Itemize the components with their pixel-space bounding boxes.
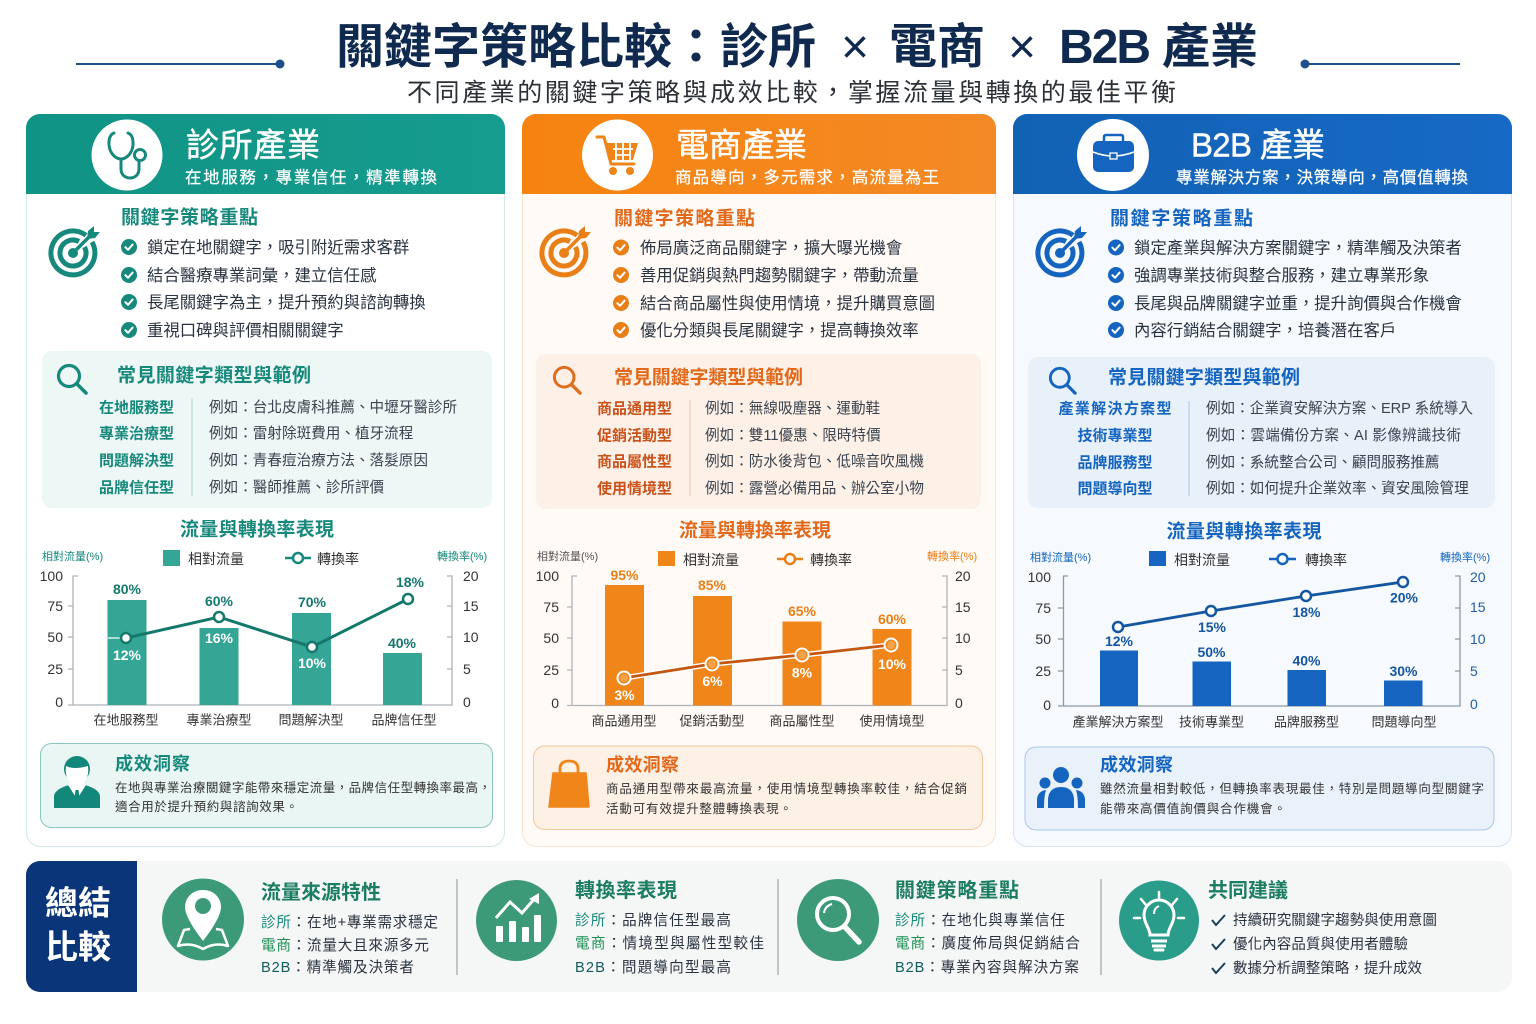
ecommerce chart: 5 [955,662,963,678]
b2b chart: 流量與轉換率表現 [1166,520,1322,542]
clinic chart: 0 [463,694,471,710]
clinic strategy points: 重視口碑與評價相關關鍵字 [147,322,344,340]
shared recommendations [1119,879,1437,977]
clinic chart: 40% [388,635,417,651]
b2b keyword types: 問題導向型 [1077,480,1153,498]
ecommerce keyword types: 例如：雙11優惠、限時特價 [705,427,881,444]
b2b chart: 轉換率 [1305,552,1347,568]
clinic chart: 100 [40,568,63,584]
ecommerce chart [536,520,977,728]
ecommerce insight: 商品通用型帶來最高流量，使用情境型轉換率較佳，結合促銷 [606,781,967,796]
ecommerce chart: 20 [955,568,971,584]
clinic strategy points [51,206,426,340]
b2b chart: 25 [1035,663,1051,679]
summary label [26,861,137,992]
icon: businessman [54,756,100,808]
title: × [1008,20,1036,74]
b2b keyword types: 例如：企業資安解決方案、ERP 系統導入 [1206,399,1473,417]
ecommerce chart: 使用情境型 [859,714,925,728]
b2b chart: 品牌服務型 [1274,714,1339,730]
ecommerce chart: 商品屬性型 [769,714,835,728]
conversion performance: B2B：問題導向型最高 [575,959,731,976]
b2b header [1013,114,1512,194]
b2b chart: 0 [1043,697,1051,713]
clinic keyword types: 問題解決型 [99,452,174,470]
conversion performance: 診所：品牌信任型最高 [575,912,731,929]
clinic chart: 專業治療型 [186,712,252,728]
b2b header: B2B 產業 [1191,126,1325,164]
ecommerce chart: 0 [551,695,559,711]
icon: team [1037,767,1085,808]
ecommerce strategy points [542,206,935,340]
b2b keyword types: 例如：雲端備份方案、AI 影像辨識技術 [1206,427,1461,444]
clinic header: 診所產業 [186,126,320,164]
clinic chart: 16% [205,630,234,646]
clinic chart: 25 [47,661,63,677]
ecommerce chart: 95% [610,567,639,583]
conversion performance: 轉換率表現 [575,879,677,902]
clinic chart: 15 [463,598,479,614]
icon: shopping bag [549,761,589,807]
b2b chart: 相對流量 [1174,552,1230,568]
ecommerce chart: 6% [702,673,723,689]
clinic header [26,114,505,194]
ecommerce chart: 85% [698,577,727,593]
panel: summary [26,861,1512,992]
ecommerce header [522,114,996,194]
ecommerce chart: 促銷活動型 [679,714,745,728]
ecommerce chart: 8% [792,664,813,680]
b2b insight [1025,747,1494,830]
clinic keyword types: 例如：青春痘治療方法、落髮原因 [209,452,428,469]
clinic chart: 12% [113,647,142,663]
b2b keyword types: 例如：如何提升企業效率、資安風險管理 [1206,479,1469,497]
b2b chart: 20 [1470,569,1486,585]
ecommerce header: 商品導向，多元需求，高流量為王 [675,168,939,187]
ecommerce keyword types: 促銷活動型 [597,426,672,444]
clinic chart: 80% [113,581,142,597]
b2b insight: 能帶來高價值詢價與合作機會。 [1100,801,1286,816]
b2b chart [1028,520,1490,730]
b2b chart: 50% [1197,644,1226,660]
ecommerce chart: 轉換率(%) [927,549,977,563]
ecommerce chart: 10% [878,656,907,672]
ecommerce chart: 10 [955,630,971,646]
clinic chart: 10% [298,655,327,671]
traffic sources: B2B：精準觸及決策者 [261,958,414,976]
ecommerce chart: 相對流量(%) [537,549,598,563]
clinic chart: 相對流量 [188,551,244,567]
ecommerce keyword types: 使用情境型 [597,480,672,498]
b2b chart: 40% [1292,652,1321,668]
ecommerce strategy points: 結合商品屬性與使用情境，提升購買意圖 [640,294,935,313]
clinic keyword types: 在地服務型 [99,400,174,416]
summary label: 總結 [45,884,111,922]
b2b strategy points [1038,206,1462,340]
key strategy points: 診所：在地化與專業信任 [895,912,1065,929]
ecommerce header: 電商產業 [676,126,807,164]
ecommerce chart: 流量與轉換率表現 [679,520,831,542]
icon: map pin [162,878,244,960]
b2b strategy points: 鎖定產業與解決方案關鍵字，精準觸及決策者 [1134,238,1462,258]
clinic chart: 60% [205,593,234,609]
clinic chart: 10 [463,629,479,645]
b2b chart: 5 [1470,663,1478,679]
b2b strategy points: 內容行銷結合關鍵字，培養潛在客戶 [1134,322,1396,340]
traffic sources [162,878,438,976]
b2b chart: 12% [1105,633,1134,649]
key strategy points [797,878,1080,976]
icon: magnifier [797,879,879,961]
conversion performance [476,879,764,976]
ecommerce chart: 15 [955,599,971,615]
ecommerce insight: 活動可有效提升整體轉換表現。 [606,801,792,816]
key strategy points: 電商：廣度佈局與促銷結合 [895,934,1080,952]
clinic insight: 成效洞察 [115,753,190,774]
ecommerce chart: 50 [543,630,559,646]
ecommerce chart: 轉換率 [810,552,852,568]
b2b chart: 問題導向型 [1371,714,1437,730]
traffic sources: 電商：流量大且來源多元 [261,936,429,954]
b2b chart: 15% [1198,619,1227,635]
clinic chart: 18% [396,574,425,590]
b2b chart: 75 [1035,600,1051,616]
icon: growth chart [476,880,557,961]
panel: b2b [1013,114,1512,846]
ecommerce keyword types: 商品屬性型 [597,452,672,470]
b2b header: 專業解決方案，決策導向，高價值轉換 [1176,168,1468,187]
ecommerce insight [534,746,982,830]
clinic strategy points: 鎖定在地關鍵字，吸引附近需求客群 [147,239,409,257]
ecommerce strategy points: 善用促銷與熱門趨勢關鍵字，帶動流量 [640,267,919,285]
shared recommendations: 優化內容品質與使用者體驗 [1233,935,1408,953]
b2b chart: 10 [1470,631,1486,647]
clinic keyword types: 專業治療型 [99,424,174,442]
clinic chart: 在地服務型 [93,712,159,728]
clinic insight [40,744,492,828]
b2b keyword types: 產業解決方案型 [1058,400,1172,418]
ecommerce insight: 成效洞察 [606,754,679,775]
ecommerce strategy points: 優化分類與長尾關鍵字，提高轉換效率 [640,322,919,340]
clinic chart: 問題解決型 [278,712,344,728]
ecommerce strategy points: 佈局廣泛商品關鍵字，擴大曝光機會 [640,238,902,258]
ecommerce chart: 商品通用型 [591,714,657,728]
ecommerce strategy points: 關鍵字策略重點 [614,206,755,230]
ecommerce chart: 65% [788,603,817,619]
clinic strategy points: 關鍵字策略重點 [121,206,258,228]
b2b chart: 相對流量(%) [1030,550,1091,564]
ecommerce keyword types: 例如：露營必備用品、辦公室小物 [705,480,924,497]
ecommerce chart: 3% [614,687,635,703]
b2b chart: 0 [1470,696,1478,712]
clinic chart [40,518,487,728]
b2b insight: 雖然流量相對較低，但轉換率表現最佳，特別是問題導向型關鍵字 [1100,781,1484,796]
b2b chart: 技術專業型 [1179,714,1244,730]
clinic chart: 品牌信任型 [371,712,437,728]
clinic keyword types: 常見關鍵字類型與範例 [117,364,311,386]
ecommerce keyword types: 例如：無線吸塵器、運動鞋 [705,399,881,417]
b2b keyword types: 常見關鍵字類型與範例 [1108,366,1300,388]
clinic keyword types [42,351,492,508]
title: 電商 [889,20,985,74]
clinic keyword types: 例如：醫師推薦、診所評價 [209,479,385,496]
b2b keyword types: 技術專業型 [1077,426,1153,444]
b2b chart: 20% [1390,590,1419,606]
title: × [841,20,869,74]
ecommerce chart: 75 [543,599,559,615]
clinic header: 在地服務，專業信任，精準轉換 [185,168,437,187]
shared recommendations: 持續研究關鍵字趨勢與使用意圖 [1233,911,1437,929]
conversion performance: 電商：情境型與屬性型較佳 [575,934,764,952]
clinic chart: 轉換率 [317,551,359,567]
panel: ecommerce [522,114,996,846]
ecommerce chart: 25 [543,662,559,678]
b2b chart: 產業解決方案型 [1072,714,1164,730]
title [336,20,1258,74]
ecommerce chart: 60% [878,611,907,627]
traffic sources: 診所：在地+專業需求穩定 [261,914,438,931]
clinic strategy points: 長尾關鍵字為主，提升預約與諮詢轉換 [147,294,426,312]
clinic strategy points: 結合醫療專業詞彙，建立信任感 [147,266,376,285]
clinic keyword types: 例如：雷射除斑費用、植牙流程 [209,425,413,442]
b2b chart: 15 [1470,599,1486,615]
clinic chart: 50 [47,629,63,645]
panel: clinic [26,114,505,846]
ecommerce keyword types: 商品通用型 [597,400,672,418]
clinic insight: 適合用於提升預約與諮詢效果。 [115,799,298,814]
title: 產業 [1162,20,1258,74]
shared recommendations: 數據分析調整策略，提升成效 [1233,959,1422,977]
ecommerce keyword types: 例如：防水後背包、低噪音吹風機 [705,453,924,470]
b2b keyword types [1028,357,1495,508]
title: B2B [1059,20,1151,74]
shared recommendations: 共同建議 [1208,879,1288,902]
clinic chart: 20 [463,568,479,584]
b2b keyword types: 品牌服務型 [1077,454,1153,472]
clinic chart: 75 [47,598,63,614]
traffic sources: 流量來源特性 [261,881,381,904]
clinic chart: 5 [463,661,471,677]
ecommerce chart: 0 [955,695,963,711]
clinic chart: 轉換率(%) [437,549,487,563]
b2b keyword types: 例如：系統整合公司、顧問服務推薦 [1206,454,1440,471]
b2b chart: 50 [1035,631,1051,647]
clinic chart: 流量與轉換率表現 [180,518,334,540]
clinic chart: 70% [298,594,327,610]
ecommerce keyword types [536,354,981,509]
clinic keyword types: 品牌信任型 [99,478,174,496]
b2b strategy points: 關鍵字策略重點 [1110,206,1253,230]
clinic chart: 0 [55,694,63,710]
ecommerce keyword types: 常見關鍵字類型與範例 [614,366,803,388]
b2b chart: 30% [1389,663,1418,679]
clinic chart: 相對流量(%) [42,549,103,563]
b2b insight: 成效洞察 [1100,754,1173,775]
b2b chart: 100 [1028,569,1051,585]
ecommerce chart: 相對流量 [683,552,739,568]
summary label: 比較 [45,928,111,966]
subtitle: 不同產業的關鍵字策略與成效比較，掌握流量與轉換的最佳平衡 [407,79,1176,107]
title: 關鍵字策略比較：診所 [336,20,816,74]
b2b strategy points: 長尾與品牌關鍵字並重，提升詢價與合作機會 [1134,295,1462,313]
clinic keyword types: 例如：台北皮膚科推薦、中壢牙醫診所 [209,399,457,416]
key strategy points: B2B：專業內容與解決方案 [895,959,1079,976]
b2b chart: 轉換率(%) [1440,550,1490,564]
ecommerce chart: 100 [536,568,559,584]
b2b strategy points: 強調專業技術與整合服務，建立專業形象 [1134,267,1429,285]
clinic insight: 在地與專業治療關鍵字能帶來穩定流量，品牌信任型轉換率最高， [115,780,491,795]
icon: light bulb [1119,880,1199,960]
key strategy points: 關鍵策略重點 [895,878,1019,902]
b2b chart: 18% [1292,604,1321,620]
